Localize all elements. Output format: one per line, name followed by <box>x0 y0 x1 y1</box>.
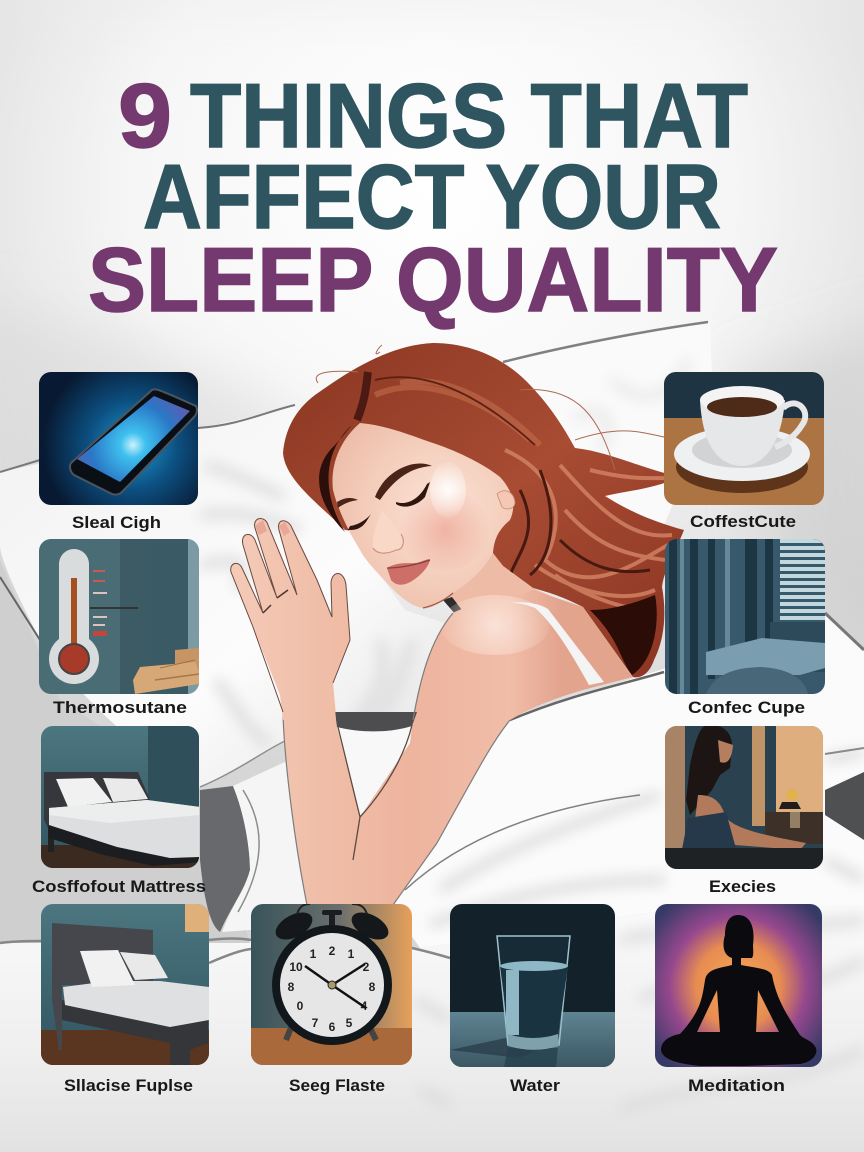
title <box>88 66 778 331</box>
panel: coffee cup: CoffestCute <box>690 513 796 531</box>
panel: alarm clock: 1 <box>310 947 317 961</box>
panel: alarm clock: 10 <box>289 960 303 974</box>
panel: alarm clock: 8 <box>288 980 295 994</box>
panel: meditation: Meditation <box>688 1077 785 1095</box>
pillow in arm crook <box>337 725 412 817</box>
panel: water <box>450 904 615 1095</box>
panel: alarm clock: 8 <box>369 980 376 994</box>
bed: sheets and blankets <box>0 560 864 1152</box>
panel: phone: Sleal Cigh <box>72 514 161 532</box>
title: THINGS THAT <box>190 66 748 167</box>
panel: mattress <box>32 726 206 896</box>
neck <box>443 553 560 615</box>
panel: thermometer: Thermosutane <box>53 699 187 717</box>
back pillow <box>500 322 712 525</box>
panel: alarm clock: 2 <box>363 960 370 974</box>
arm and shoulder <box>280 590 633 905</box>
panel: curtained bedroom <box>665 539 825 717</box>
hand <box>231 519 350 720</box>
woman sleeping <box>231 343 684 905</box>
panel: coffee cup <box>664 372 824 531</box>
panel: alarm clock: 6 <box>329 1020 336 1034</box>
dark gap by jaw <box>443 597 462 615</box>
panel: thermometer <box>39 539 199 717</box>
panel: water: Water <box>510 1077 561 1095</box>
front pillow <box>0 405 450 788</box>
face <box>332 423 513 608</box>
panel: bed <box>41 904 209 1095</box>
panel: curtained bedroom: Confec Cupe <box>688 699 805 717</box>
hair <box>283 343 684 677</box>
panel: bed: Sllacise Fuplse <box>64 1077 193 1095</box>
top strap <box>510 602 604 685</box>
panel: alarm clock: Seeg Flaste <box>289 1077 385 1095</box>
title: 9 <box>118 66 172 167</box>
panel: alarm clock <box>251 904 412 1095</box>
panel: alarm clock: 4 <box>361 999 368 1013</box>
panel: alarm clock: 5 <box>346 1016 353 1030</box>
panel: alarm clock: 0 <box>297 999 304 1013</box>
panel: alarm clock: 2 <box>329 944 336 958</box>
title: AFFECT YOUR <box>143 147 721 248</box>
panel: mattress: Cosffofout Mattress <box>32 878 206 896</box>
panel: woman at desk: Execies <box>709 878 776 896</box>
panel: alarm clock: 1 <box>348 947 355 961</box>
panel: meditation <box>655 904 822 1095</box>
shoulder highlight <box>440 595 550 655</box>
panel: phone <box>39 372 198 532</box>
panel: alarm clock: 7 <box>312 1016 319 1030</box>
panel: woman at desk <box>665 725 823 896</box>
title: SLEEP QUALITY <box>88 230 778 331</box>
